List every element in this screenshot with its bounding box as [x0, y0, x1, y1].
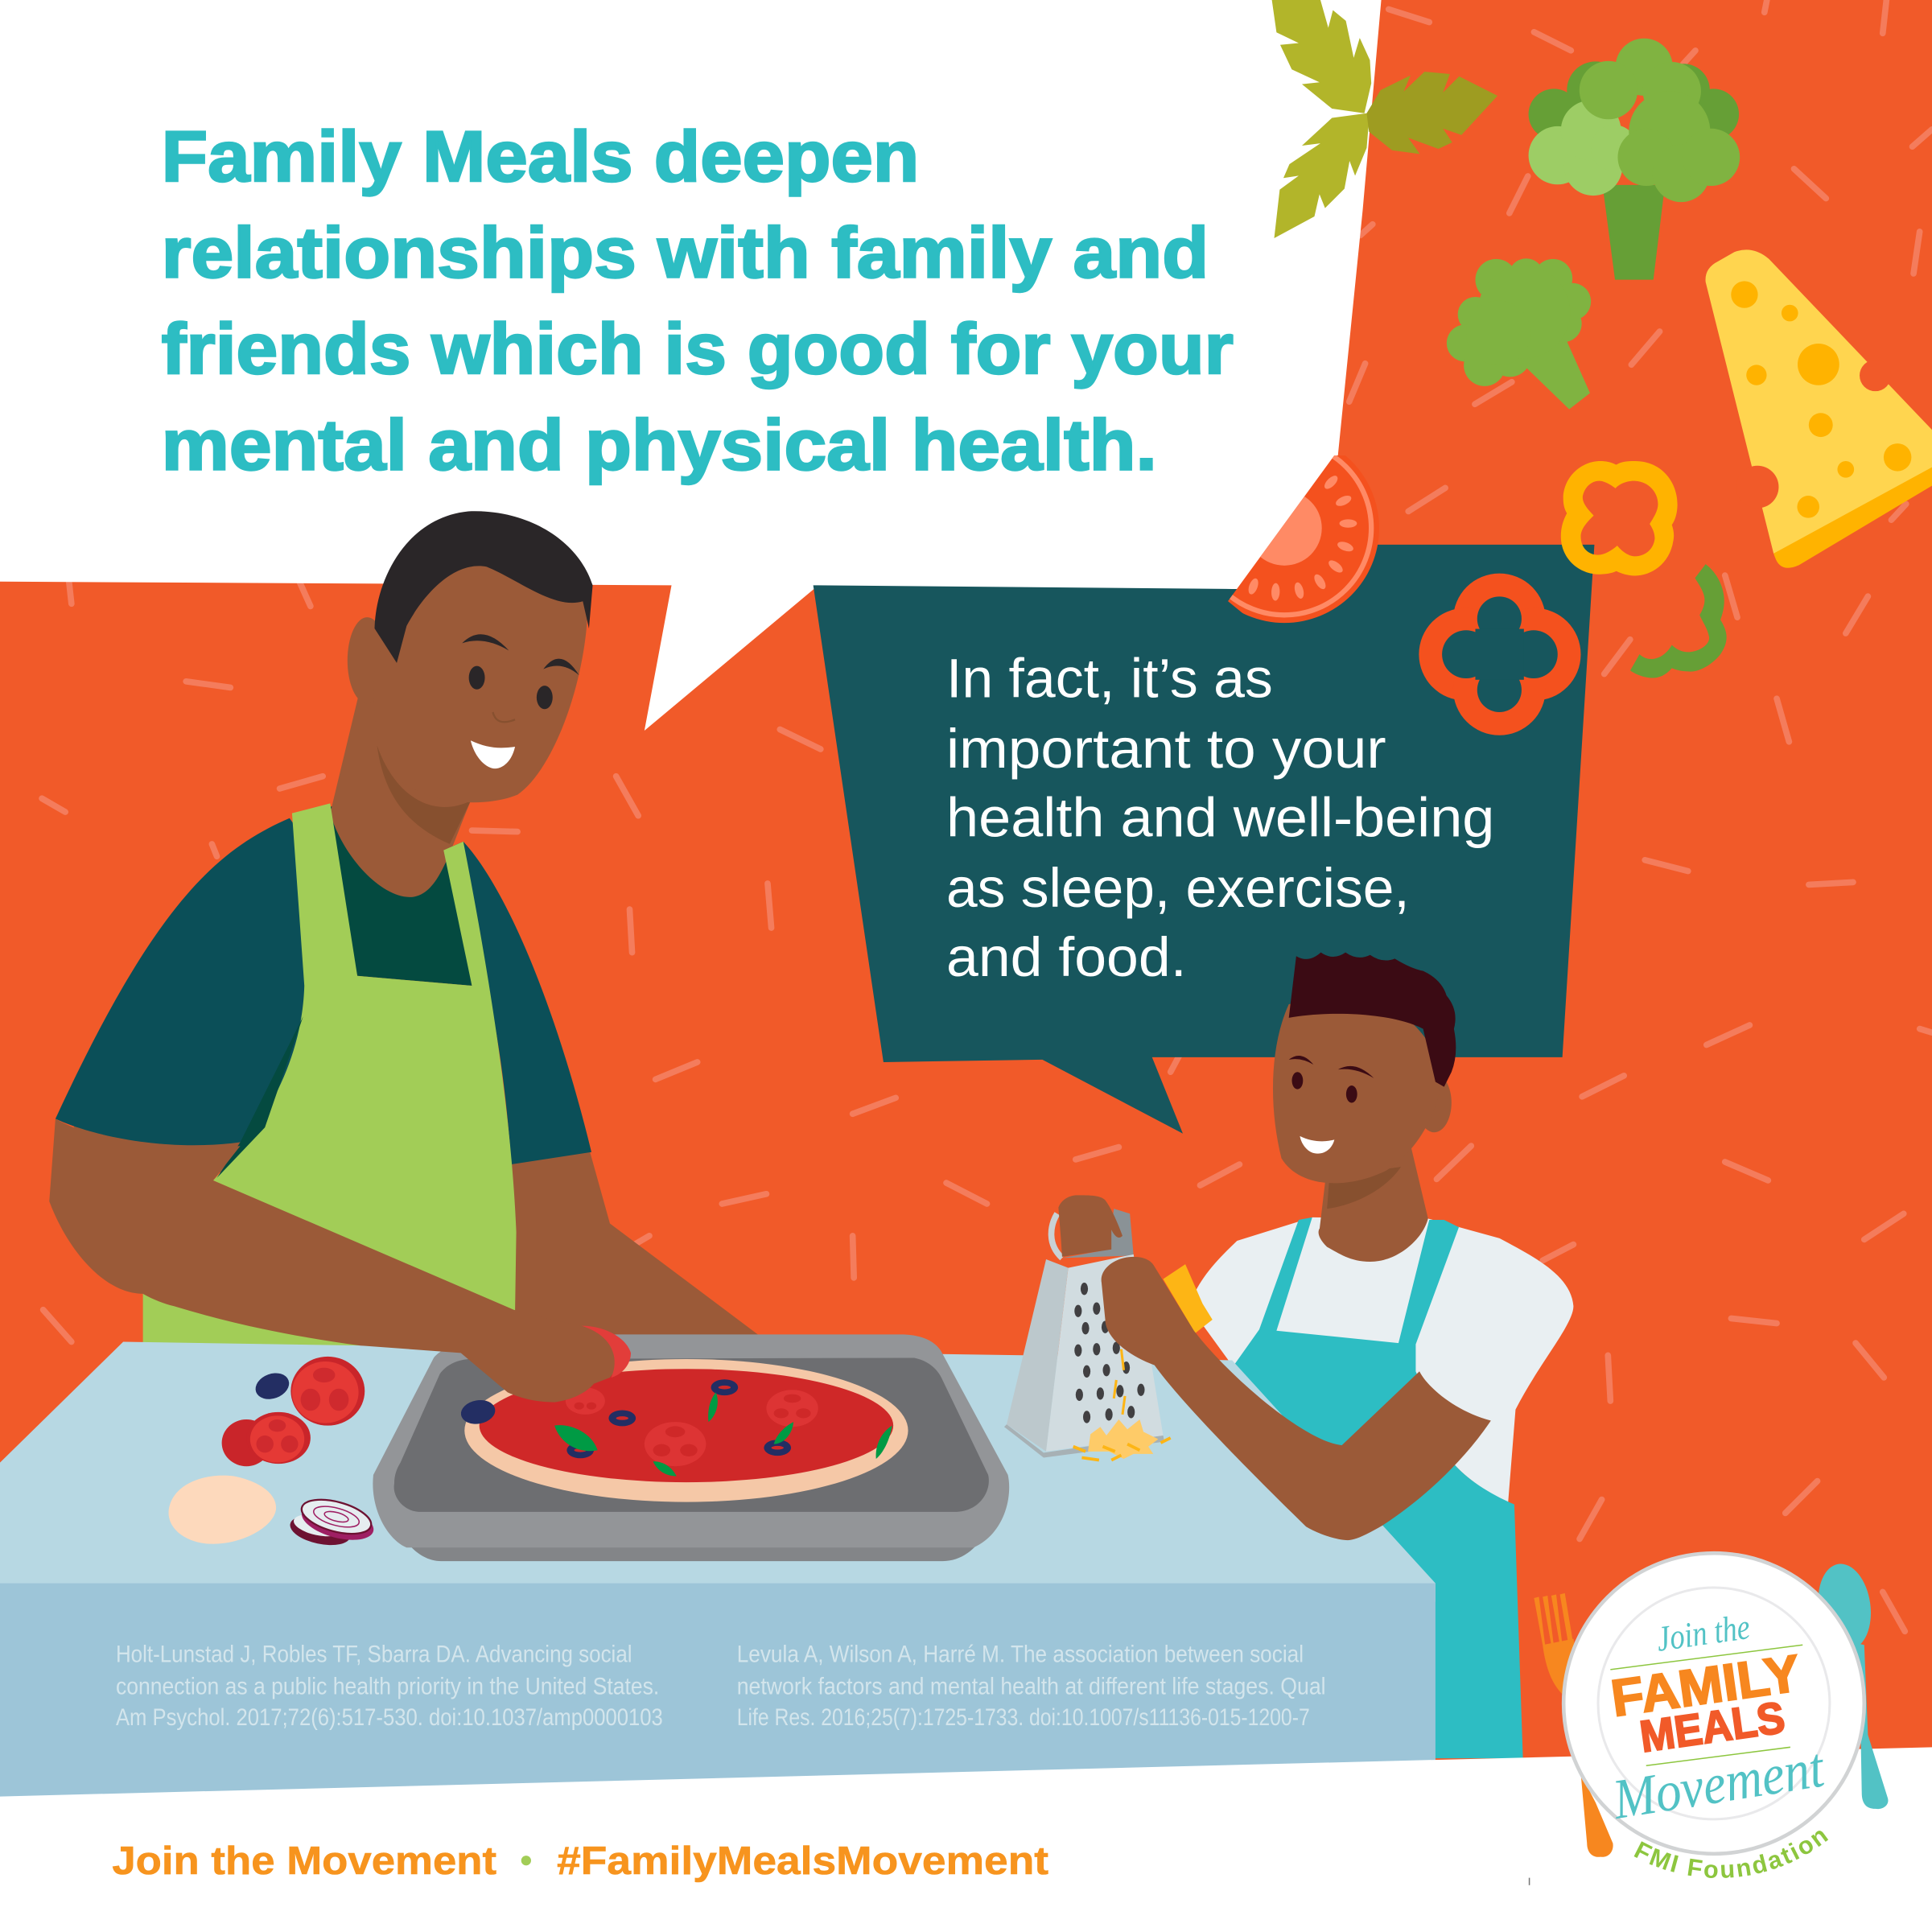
- boy hair: [1289, 953, 1456, 1087]
- man: body and head: [56, 511, 789, 1368]
- pizza: [459, 1359, 908, 1502]
- icon: small broccoli: [1447, 258, 1591, 410]
- sleeve shadow: [217, 1016, 303, 1178]
- body text in dark bubble: important to your: [946, 718, 1386, 780]
- references left: Am Psychol. 2017;72(6):517-530. doi:10.1037/amp0000103: [116, 1704, 663, 1731]
- logo plate: [1563, 1553, 1864, 1854]
- heading: [162, 117, 1234, 484]
- white speech bubble: [0, 0, 1382, 731]
- food illustrations: [1189, 0, 1932, 735]
- man upper arm underlay: [74, 1097, 246, 1183]
- man face: [373, 558, 589, 802]
- references left: Holt-Lunstad J, Robles TF, Sbarra DA. Advancing social: [116, 1642, 632, 1668]
- man apron: [213, 803, 517, 1312]
- boy eyes and brows: [1289, 1056, 1374, 1102]
- basil leaves: [554, 1392, 892, 1476]
- body text in dark bubble: as sleep, exercise,: [946, 857, 1410, 919]
- grater left face: [1007, 1259, 1069, 1452]
- icon: cheese wedge: [1706, 249, 1932, 568]
- man neck: [330, 690, 499, 897]
- grater holes: [1074, 1283, 1145, 1423]
- man right arm: [511, 1148, 789, 1368]
- grated cheese falling: [1114, 1349, 1125, 1415]
- references right: [737, 1642, 1326, 1731]
- grater front face: [1046, 1254, 1164, 1452]
- footer call to action: #FamilyMealsMovement: [557, 1839, 1048, 1883]
- ingredients on table: [169, 1357, 377, 1550]
- logo green rules: [1610, 1645, 1802, 1765]
- icon: large broccoli: [1529, 39, 1740, 280]
- pizza sauce: [480, 1369, 893, 1482]
- pizza tomato slices: [566, 1387, 818, 1466]
- footer call to action: Join the Movement: [112, 1839, 496, 1883]
- man undershirt: [323, 801, 472, 986]
- icon: parsley: [1272, 0, 1497, 238]
- man hair: [375, 511, 593, 663]
- boy ear: [1417, 1073, 1452, 1132]
- boy smile: [1300, 1136, 1334, 1154]
- boy arm: [1102, 1257, 1491, 1540]
- table top: [0, 1342, 1436, 1602]
- logo plate inner ring: [1598, 1588, 1830, 1819]
- man neck shadow: [377, 745, 471, 844]
- references left: connection as a public health priority in the United States.: [116, 1673, 659, 1699]
- boy hand on grater: [1058, 1195, 1123, 1257]
- tomato slices: [222, 1357, 365, 1466]
- man nose: [492, 712, 515, 722]
- man smile: [471, 740, 515, 768]
- boy neck shadow: [1327, 1167, 1401, 1209]
- boy cheese piece: [1164, 1264, 1213, 1333]
- body text in dark bubble: [946, 648, 1494, 988]
- references left: [116, 1642, 663, 1731]
- references right: Life Res. 2016;25(7):1725-1733. doi:10.1007/s11136-015-1200-7: [737, 1704, 1310, 1731]
- heading: friends which is good for your: [162, 309, 1234, 389]
- logo fork: [1534, 1593, 1613, 1857]
- pizza crust: [464, 1359, 908, 1502]
- logo text: FMI Foundation: FMI Foundation: [1633, 1831, 1828, 1878]
- grater base: [1004, 1424, 1164, 1457]
- logo text: family: FAMILY: [1608, 1644, 1803, 1728]
- body text in dark bubble: health and well-being: [946, 787, 1494, 849]
- olive: [252, 1369, 293, 1403]
- icon: green pepper piece: [1630, 564, 1727, 678]
- man apron lower: [143, 1287, 369, 1349]
- footer call to action: [112, 1839, 1048, 1883]
- red onion: [287, 1493, 377, 1550]
- icon: yellow pepper ring: [1561, 461, 1678, 575]
- tomato slice in hand: [582, 1326, 631, 1378]
- pizza olives: [566, 1379, 791, 1458]
- logo spoon: [1813, 1560, 1888, 1809]
- man eyes and brows: [462, 634, 579, 709]
- body text in dark bubble: In fact, it’s as: [946, 648, 1273, 710]
- icon: red pepper ring: [1419, 574, 1581, 735]
- heading: Family Meals deepen: [162, 117, 919, 196]
- references right: network factors and mental health at different life stages. Qual: [737, 1673, 1326, 1699]
- footer dot: [521, 1856, 531, 1865]
- heading: relationships with family and: [162, 213, 1209, 293]
- logo: Family Meals Movement: [1529, 1551, 1888, 1885]
- boy: torso: [1189, 953, 1573, 1758]
- baking tray: [373, 1334, 1009, 1561]
- boy face: [1273, 999, 1442, 1183]
- tiny print mark: [1529, 1878, 1530, 1885]
- logo text: join the: Join the: [1654, 1606, 1753, 1659]
- icon: tomato wedge: [1228, 455, 1379, 623]
- whole olive: [459, 1398, 497, 1427]
- logo text: meals: MEALS: [1637, 1692, 1788, 1761]
- boy apron: [1232, 1217, 1523, 1758]
- dark speech bubble: [814, 545, 1594, 1134]
- references right: Levula A, Wilson A, Harré M. The association between social: [737, 1642, 1304, 1668]
- boy t-shirt: [1189, 1217, 1573, 1502]
- boy neck: [1319, 1146, 1428, 1262]
- body text in dark bubble: and food.: [946, 926, 1187, 988]
- grater handle: [1062, 1209, 1134, 1258]
- grated cheese pile: [1088, 1419, 1158, 1459]
- grater: [1004, 1209, 1171, 1460]
- man ear: [348, 617, 387, 703]
- logo text: movement: Movement: [1608, 1736, 1829, 1831]
- dough ball: [169, 1476, 276, 1544]
- man right sleeve: [443, 842, 591, 1164]
- heading: mental and physical health.: [162, 405, 1157, 484]
- man left sleeve: [56, 818, 320, 1145]
- table front: [0, 1584, 1436, 1811]
- man left arm and hand: [49, 1118, 621, 1403]
- bottom white band: [0, 1747, 1932, 1932]
